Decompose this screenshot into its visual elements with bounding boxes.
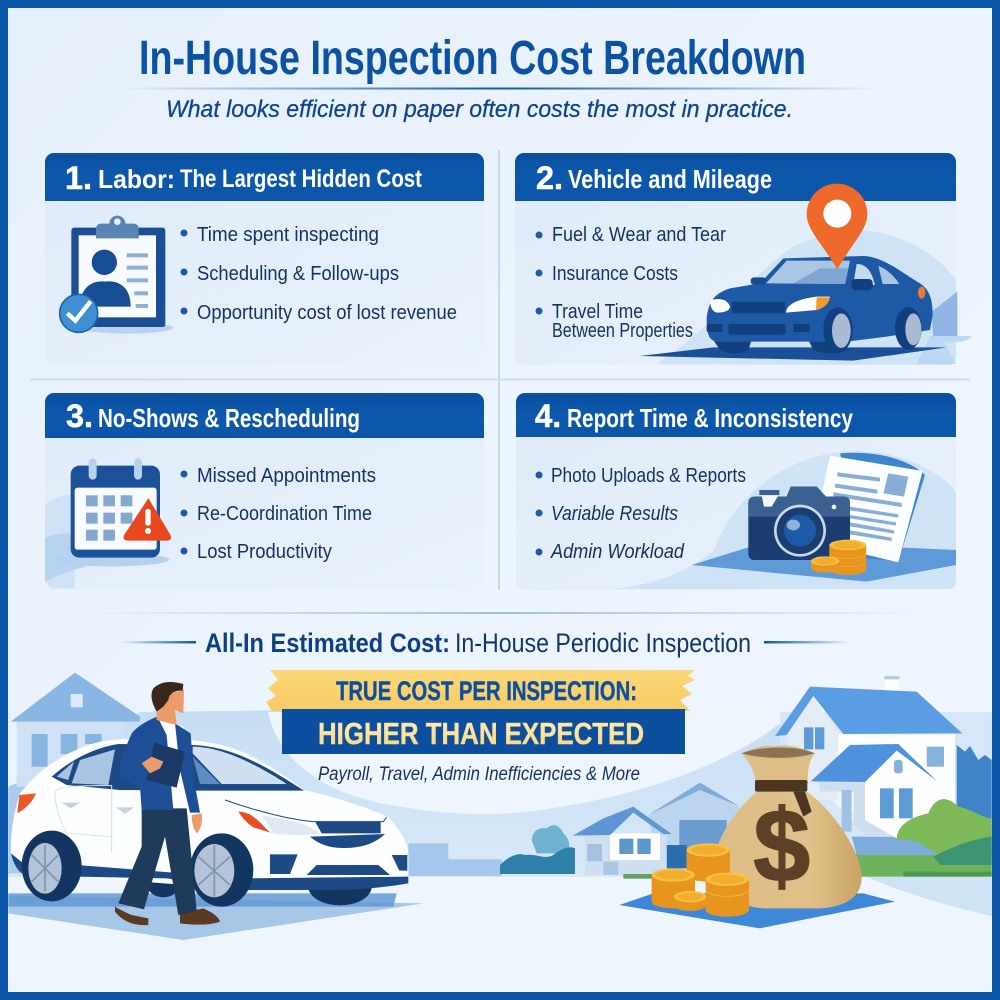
panel 3 bullet list: Re-Coordination Time xyxy=(197,503,372,525)
panel 4 bullet list: Photo Uploads & Reports xyxy=(551,465,746,487)
panel 2: vehicle and mileage xyxy=(515,153,972,365)
illustration: camera, report and coins xyxy=(613,451,956,589)
panel 2 bullet list: Insurance Costs xyxy=(552,263,678,285)
title: In-House Inspection Cost Breakdown xyxy=(139,32,806,85)
illustration: money bag and coin stacks xyxy=(619,745,895,928)
section heading: all-in estimated cost xyxy=(120,628,850,658)
panel 2 header: Vehicle and Mileage xyxy=(568,164,772,194)
panel 2 bullet list: Travel Time xyxy=(552,301,643,323)
panel 4 bullet list: Variable Results xyxy=(551,503,678,525)
panel 2 bullet list: Between Properties xyxy=(552,320,693,342)
panel 3 bullet list: Lost Productivity xyxy=(197,541,332,563)
man walking with tablet xyxy=(115,682,220,925)
section heading: all-in estimated cost: All-In Estimated Cost: xyxy=(205,628,450,658)
panel 4 bullet list xyxy=(536,465,746,563)
panel 1 bullet list: Scheduling & Follow-ups xyxy=(197,263,399,285)
panel 2 header: 2. xyxy=(536,160,563,196)
illustration: blue car with orange location pin xyxy=(640,184,972,365)
panel 1 bullet list xyxy=(180,224,457,324)
panel 1 header xyxy=(45,153,484,201)
ground shadow under the car xyxy=(8,896,423,940)
illustration: money bag and coin stacks: $ xyxy=(753,788,810,904)
icon: calendar with warning triangle xyxy=(45,458,170,588)
panel 2 bullet list: Fuel & Wear and Tear xyxy=(552,224,726,246)
panel 1: labor xyxy=(45,153,484,365)
illustration: background houses, trees and right-side house xyxy=(500,676,992,879)
panel 4 bullet list: Admin Workload xyxy=(550,541,685,563)
callout: true cost banner: HIGHER THAN EXPECTED xyxy=(318,716,644,751)
illustration: left background house xyxy=(8,673,502,876)
panel 2 header xyxy=(515,153,956,201)
illustration: white car with walking man xyxy=(8,682,423,940)
panel 1 header: The Largest Hidden Cost xyxy=(180,165,423,193)
panel 1 bullet list: Opportunity cost of lost revenue xyxy=(197,302,457,324)
callout: true cost banner xyxy=(266,670,695,785)
panel 3 header: No-Shows & Rescheduling xyxy=(98,403,360,433)
panel 2 bullet list xyxy=(536,224,726,342)
icon: clipboard with person and check xyxy=(60,216,173,334)
coin stacks xyxy=(652,843,749,917)
panel 3 bullet list: Missed Appointments xyxy=(197,465,376,487)
panel 4 header: Report Time & Inconsistency xyxy=(567,403,853,433)
panel 3: no-shows and rescheduling xyxy=(45,393,484,590)
subtitle: What looks efficient on paper often costs the most in practice. xyxy=(166,96,793,123)
panel 1 header: Labor: xyxy=(98,164,175,194)
panel 3 header xyxy=(45,393,484,438)
panel 1 header: 1. xyxy=(65,160,92,196)
panel 4 header: 4. xyxy=(535,398,561,434)
panel 3 bullet list xyxy=(180,465,376,563)
callout caption: Payroll, Travel, Admin Inefficiencies & More xyxy=(318,764,640,785)
panel 3 header: 3. xyxy=(66,398,93,434)
panel 4: report time and inconsistency xyxy=(516,393,956,590)
panel 1 bullet list: Time spent inspecting xyxy=(197,224,379,246)
section heading: all-in estimated cost: In-House Periodic Inspection xyxy=(455,628,751,658)
panel 4 header xyxy=(516,393,956,437)
scene background: neighbourhood landscape xyxy=(8,710,992,992)
callout: true cost banner: TRUE COST PER INSPECTION: xyxy=(336,676,637,706)
